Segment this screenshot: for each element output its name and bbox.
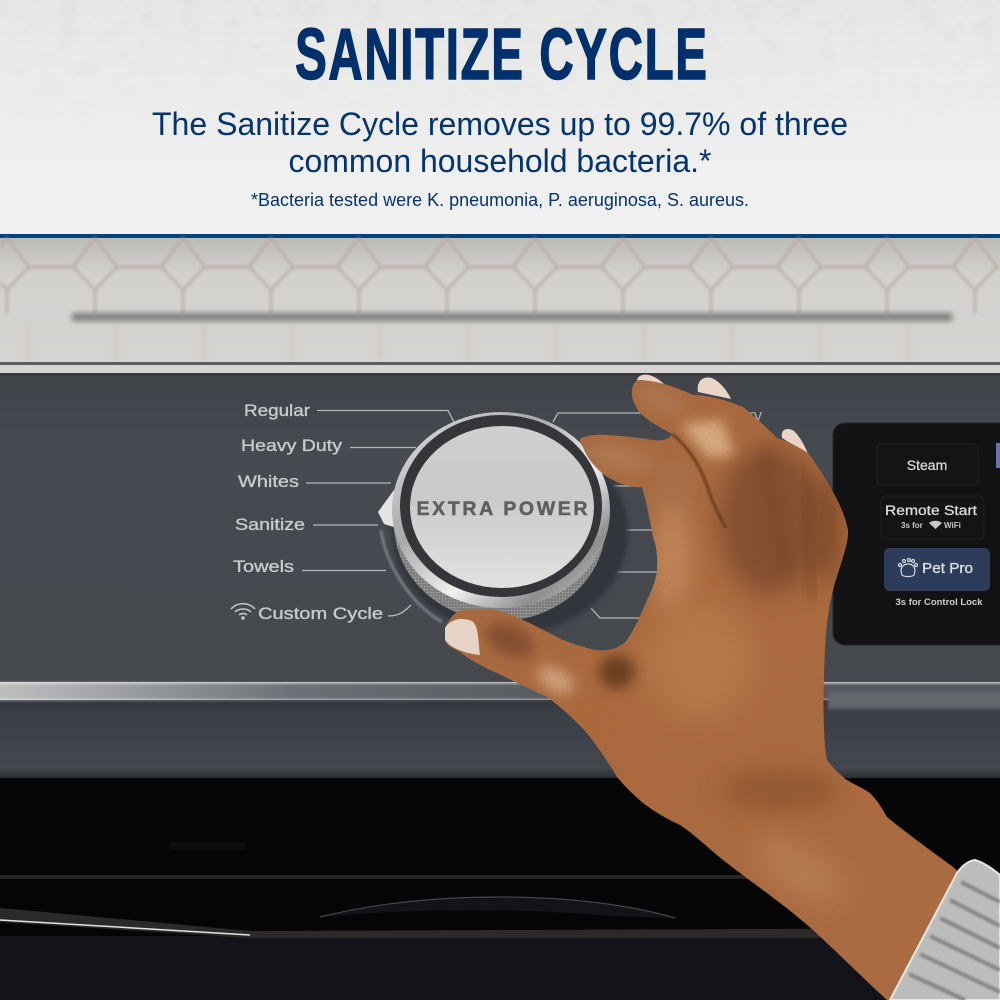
icon: paw: [898, 558, 918, 576]
dorsal shadow: [720, 445, 820, 595]
backsplash tile wall: [0, 238, 1000, 363]
icon: wifi: [231, 604, 255, 619]
remote start button: 3s for: [901, 521, 923, 530]
subtitle: [152, 106, 848, 179]
sweater cuff: [890, 860, 1000, 1000]
lower door black area: [0, 778, 1000, 1000]
skin grain: [703, 431, 714, 450]
title: SANITIZE CYCLE: [295, 14, 707, 94]
control lock note: 3s for Control Lock: [896, 597, 984, 607]
cycle labels left: Towels: [233, 557, 294, 576]
skin base: [445, 380, 960, 1000]
remote start button: Remote Start: [885, 503, 977, 518]
skin shading: [482, 380, 848, 900]
dial label: EXTRA POWER: [416, 498, 588, 520]
cycle labels left: Heavy Duty: [241, 436, 343, 455]
subtitle: The Sanitize Cycle removes up to 99.7% of three: [152, 106, 848, 142]
knurled base: [394, 427, 606, 621]
pet pro button: [884, 548, 990, 591]
hand: [440, 370, 960, 1000]
nails behind fingers: [637, 375, 808, 454]
finger creases: [672, 434, 726, 528]
metal rim: [392, 412, 610, 608]
thumb nail: [445, 619, 480, 655]
dial knob: [392, 412, 610, 621]
cycle labels left: Sanitize: [235, 515, 305, 534]
dial shadow and glow: [378, 430, 628, 634]
dial leader lines: [302, 410, 660, 618]
cycle labels left: ry: [748, 406, 763, 425]
subtitle: common household bacteria.*: [288, 143, 712, 179]
remote start button: WiFi: [944, 521, 961, 530]
pet pro button: Pet Pro: [922, 561, 973, 577]
dial face: [410, 426, 594, 588]
remote start button: [881, 496, 984, 539]
steam button: [877, 444, 978, 485]
dark ring: [400, 415, 602, 597]
middle finger: [639, 386, 680, 414]
header panel: [0, 0, 1000, 238]
footnote: *Bacteria tested were K. pneumonia, P. aeruginosa, S. aureus.: [251, 190, 749, 210]
washer top trim: [0, 362, 1000, 376]
cycle labels left: Custom Cycle: [258, 604, 383, 623]
index finger: [584, 443, 652, 473]
knuckle highlight: [680, 420, 734, 458]
steam button: Steam: [907, 457, 947, 473]
cycle labels left: [233, 401, 763, 623]
control panel body: [0, 376, 1000, 780]
cycle labels left: Regular: [244, 401, 310, 420]
cycle labels left: Whites: [238, 472, 299, 491]
web shadow: [599, 655, 635, 689]
touch display panel: [833, 423, 1000, 645]
thumb texture: [482, 618, 538, 662]
palm mid tone: [650, 605, 750, 715]
wrist tones: [720, 770, 840, 810]
